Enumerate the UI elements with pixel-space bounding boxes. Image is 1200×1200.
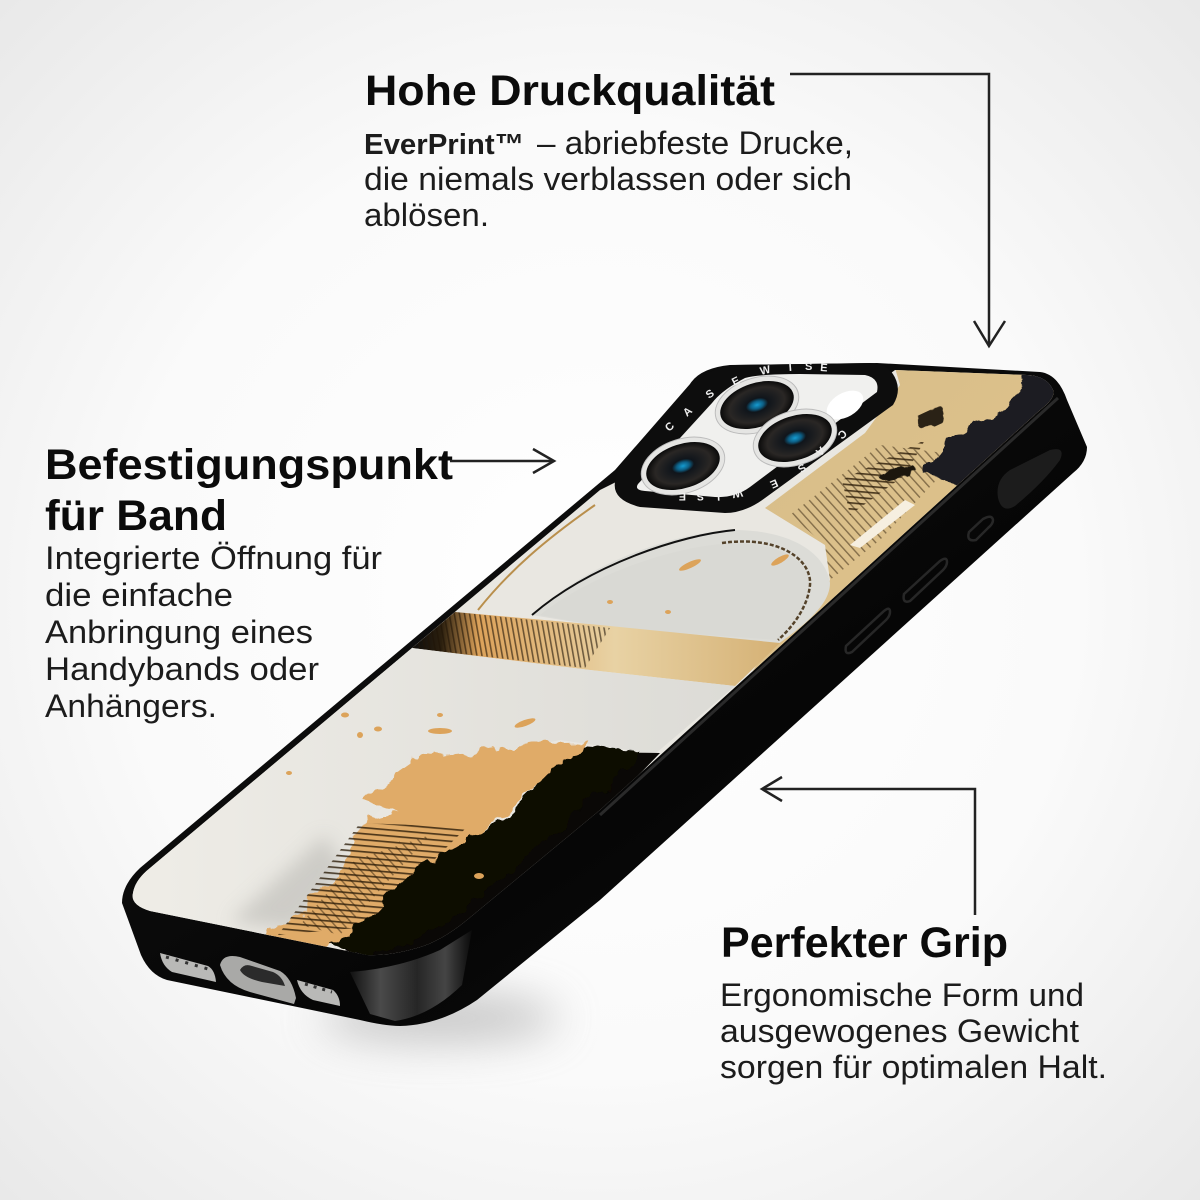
description: ablösen. (364, 197, 489, 233)
brand text lower: CASEWISE (679, 427, 849, 502)
artwork base (132, 370, 1054, 956)
lower white field (120, 648, 735, 940)
callout: strap attachment (45, 441, 453, 724)
description (45, 540, 382, 724)
description (364, 125, 853, 233)
gold horizontal band (412, 612, 780, 686)
callout: grip (720, 919, 1107, 1085)
brand text upper: CASEWISE (663, 361, 828, 434)
orange paint splash (267, 742, 590, 952)
description: die einfache (45, 577, 233, 613)
case lip (600, 398, 1058, 815)
case corner highlight (350, 930, 472, 1021)
description: sorgen für optimalen Halt. (720, 1049, 1107, 1085)
painted arch (478, 505, 830, 644)
heading (45, 441, 453, 540)
description: – abriebfeste Drucke, (537, 125, 853, 161)
phone shadow (320, 994, 560, 1042)
side buttons (846, 517, 993, 653)
case body (122, 363, 1087, 1026)
strap attachment lug (998, 449, 1062, 509)
heading: Befestigungspunkt (45, 441, 453, 489)
description (720, 977, 1107, 1085)
bump frame (615, 363, 898, 513)
charging port (220, 956, 296, 1004)
gold drops (286, 712, 536, 879)
callout: print quality (364, 67, 853, 233)
lens right (746, 399, 844, 477)
lens top (708, 366, 806, 444)
description: Integrierte Öffnung für (45, 540, 382, 576)
arrow: grip (762, 777, 975, 915)
phone in black case (100, 350, 1100, 1026)
grid hatching on orange (278, 823, 467, 935)
description: Handybands oder (45, 651, 319, 687)
window glare (822, 385, 868, 425)
black upper corner (924, 374, 1060, 487)
speaker grille right (297, 980, 340, 1006)
arrow: strap attachment (450, 449, 554, 473)
description: EverPrint™ (364, 129, 524, 161)
band hatching (412, 612, 610, 668)
heading: Perfekter Grip (721, 919, 1008, 967)
heading: für Band (45, 492, 227, 540)
description: Anhängers. (45, 688, 217, 724)
arrow: print quality (790, 74, 1005, 346)
description: Ergonomische Form und (720, 977, 1084, 1013)
gold dark detail strokes (792, 406, 944, 578)
arch paint flecks (607, 552, 790, 614)
lens left (634, 427, 732, 505)
description: Anbringung eines (45, 614, 313, 650)
grey brush wash (230, 835, 345, 930)
description: ausgewogenes Gewicht (720, 1013, 1079, 1049)
heading: Hohe Druckqualität (365, 67, 775, 115)
printed back artwork (132, 370, 1054, 956)
description: die niemals verblassen oder sich (364, 161, 852, 197)
camera bump (615, 361, 898, 513)
speaker grille left (160, 953, 216, 982)
black lower paint (333, 747, 660, 960)
camera window (637, 374, 878, 497)
gold upper area (752, 370, 1054, 672)
